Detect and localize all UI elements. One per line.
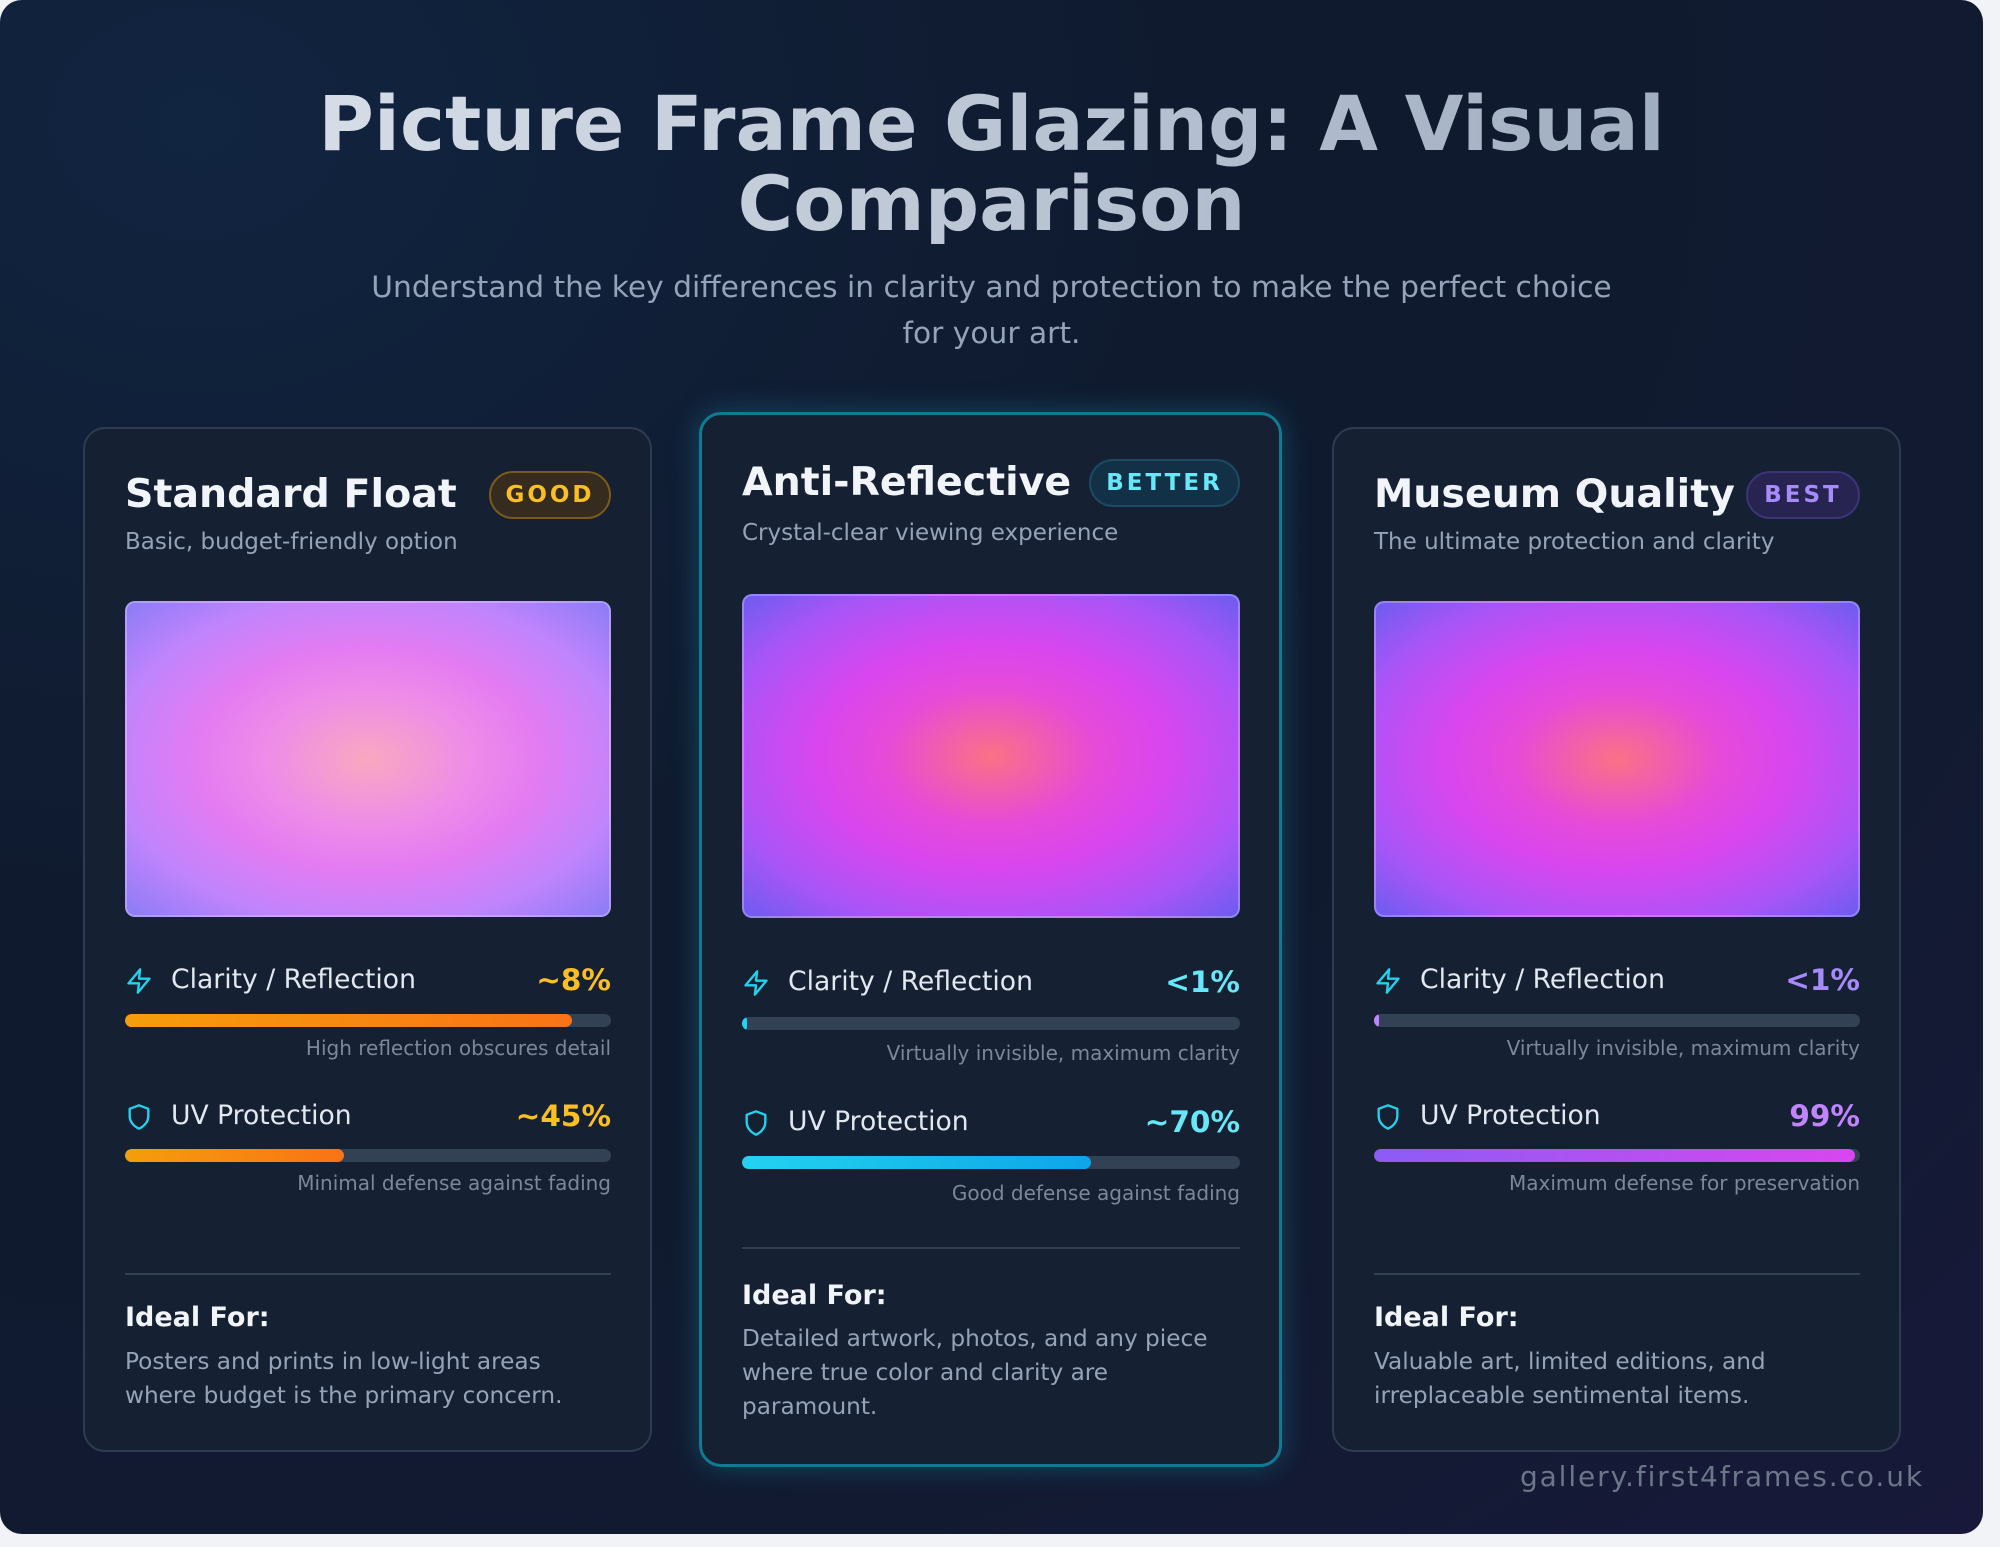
title: Picture Frame Glazing: A Visual — [318, 79, 1665, 168]
clarity row: Clarity / Reflection — [171, 964, 416, 995]
clarity caption: Virtually invisible, maximum clarity — [1507, 1036, 1860, 1060]
clarity row: <1% — [1165, 965, 1240, 999]
card title: Standard Float — [125, 471, 457, 517]
ideal for text: Detailed artwork, photos, and any piece where true color and clarity are paramount. — [742, 1325, 1207, 1420]
clarity row — [744, 965, 1240, 999]
clarity row — [1376, 963, 1860, 997]
uv row: ~45% — [516, 1099, 611, 1133]
clarity row: Clarity / Reflection — [788, 966, 1033, 997]
ideal for heading: Ideal For: — [1374, 1302, 1519, 1333]
footer url: gallery.first4frames.co.uk — [1520, 1460, 1924, 1493]
uv row — [128, 1099, 611, 1133]
card subtitle: The ultimate protection and clarity — [1374, 529, 1774, 555]
panel: anti-reflective — [699, 412, 1282, 1467]
badge: good — [489, 471, 611, 519]
ideal for heading: Ideal For: — [125, 1302, 270, 1333]
ideal for text: Posters and prints in low-light areas where budget is the primary concern. — [125, 1348, 562, 1409]
title: Comparison — [738, 159, 1245, 248]
uv row: ~70% — [1145, 1105, 1240, 1139]
image: glazing preview — [1374, 601, 1860, 917]
uv caption: Minimal defense against fading — [297, 1171, 611, 1195]
uv caption: Good defense against fading — [952, 1181, 1240, 1205]
clarity row: Clarity / Reflection — [1420, 964, 1665, 995]
uv row — [1378, 1099, 1860, 1133]
clarity row — [127, 963, 611, 997]
badge: best: BEST — [1764, 482, 1842, 508]
card subtitle: Crystal-clear viewing experience — [742, 520, 1118, 546]
card subtitle: Basic, budget-friendly option — [125, 529, 458, 555]
subtitle: Understand the key differences in clarity and protection to make the perfect choice for your art. — [371, 270, 1612, 351]
card title: Museum Quality — [1374, 471, 1735, 517]
clarity bar — [1374, 1014, 1860, 1027]
ideal for heading: Ideal For: — [742, 1280, 887, 1311]
panel: standard float — [83, 427, 652, 1452]
image: glazing preview — [742, 594, 1240, 918]
uv bar — [125, 1149, 611, 1162]
clarity row: <1% — [1785, 963, 1860, 997]
uv row — [746, 1105, 1240, 1139]
ideal for text: Valuable art, limited editions, and irreplaceable sentimental items. — [1374, 1348, 1766, 1409]
uv bar — [1374, 1149, 1860, 1162]
uv row: UV Protection — [1420, 1100, 1601, 1131]
clarity row: ~8% — [536, 963, 611, 997]
badge: good: GOOD — [505, 482, 595, 508]
clarity bar — [125, 1014, 611, 1027]
badge: better — [1089, 459, 1240, 507]
uv caption: Maximum defense for preservation — [1509, 1171, 1860, 1195]
panel: museum quality — [1332, 427, 1901, 1452]
badge: best — [1746, 471, 1860, 519]
uv row: UV Protection — [171, 1100, 352, 1131]
clarity caption: High reflection obscures detail — [306, 1036, 611, 1060]
clarity bar — [742, 1017, 1240, 1030]
title — [0, 84, 1983, 244]
uv row: 99% — [1789, 1099, 1860, 1133]
image: glazing preview — [125, 601, 611, 917]
clarity caption: Virtually invisible, maximum clarity — [887, 1041, 1240, 1065]
badge: better: BETTER — [1106, 470, 1223, 496]
card title: Anti-Reflective — [742, 459, 1071, 505]
uv row: UV Protection — [788, 1106, 969, 1137]
uv bar — [742, 1156, 1240, 1169]
